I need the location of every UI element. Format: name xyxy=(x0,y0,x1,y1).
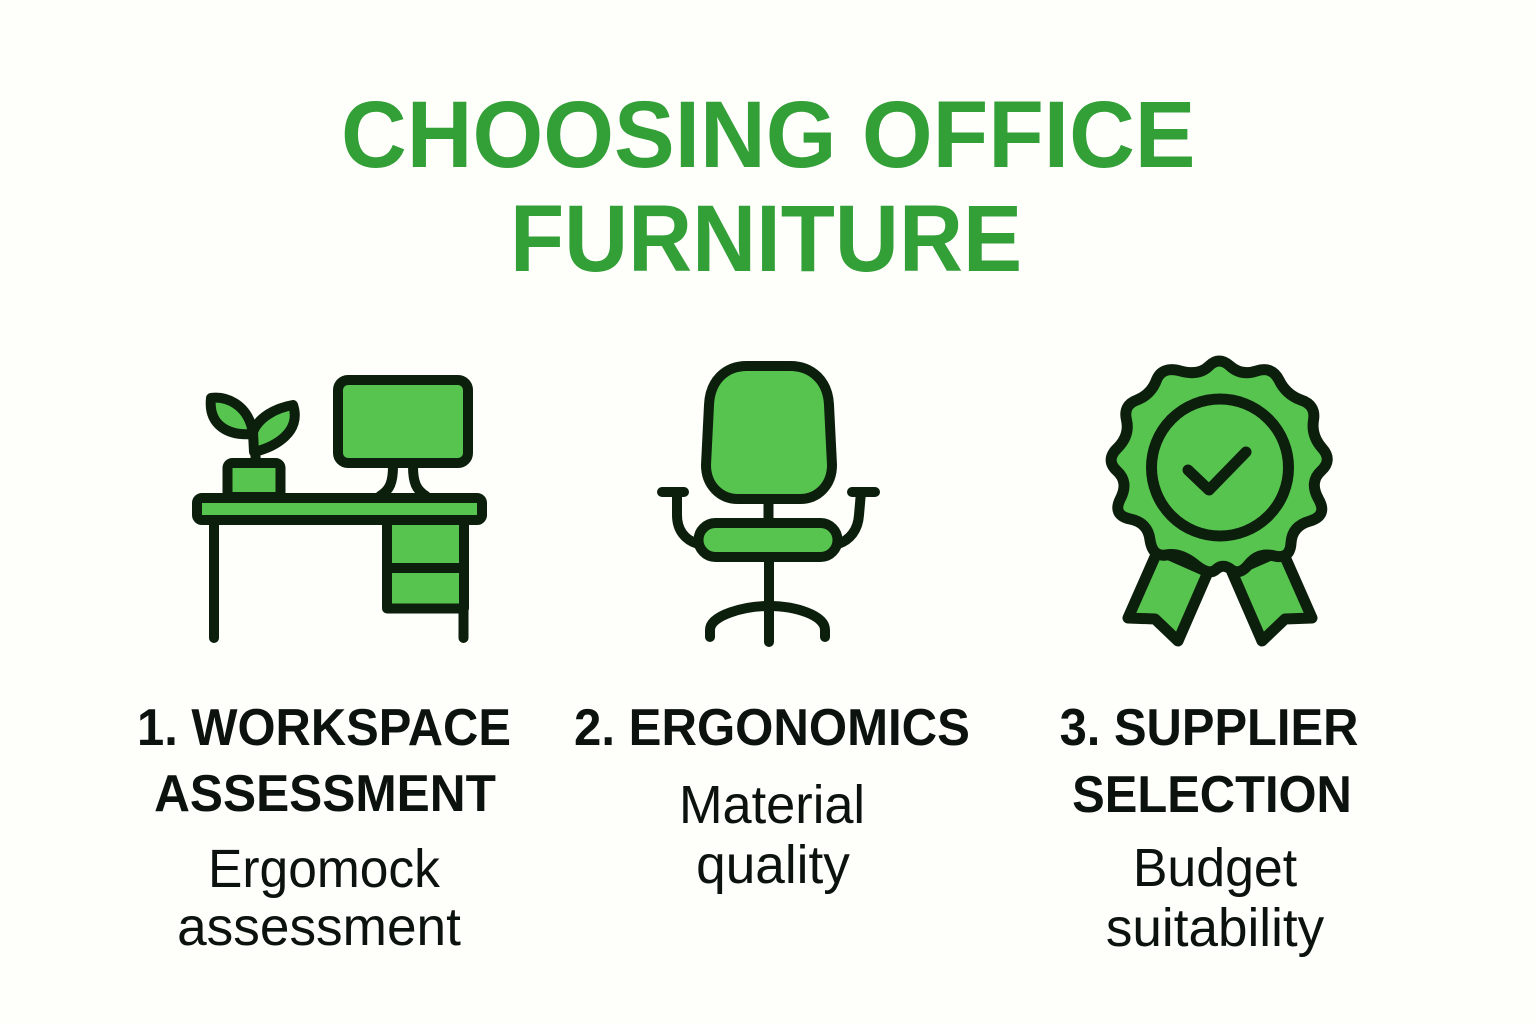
step 1 description: assessment xyxy=(177,897,461,957)
step 1 description: Ergomock xyxy=(208,839,439,899)
step 3 text block xyxy=(1060,699,1358,958)
title: CHOOSING OFFICE xyxy=(341,82,1196,188)
step 2 heading: 2. ERGONOMICS xyxy=(574,699,970,757)
title xyxy=(341,82,1196,292)
step 1 heading: ASSESSMENT xyxy=(154,765,496,823)
step 1 description xyxy=(177,839,461,957)
step 1 text block xyxy=(137,699,511,957)
step 3 heading: 3. SUPPLIER xyxy=(1060,699,1358,757)
icon: desk with monitor and plant xyxy=(192,375,487,643)
step 1 heading: 1. WORKSPACE xyxy=(137,699,511,757)
step 3 description: Budget xyxy=(1132,838,1297,898)
step 2 description xyxy=(679,775,865,895)
step 3 description: suitability xyxy=(1106,898,1324,958)
step 3 heading xyxy=(1060,699,1358,824)
step 2 description: Material xyxy=(679,775,865,835)
step 2 description: quality xyxy=(696,835,850,895)
icon: office chair xyxy=(657,361,880,647)
icon: award badge with check xyxy=(1106,356,1333,646)
step 1 heading xyxy=(137,699,511,823)
title: FURNITURE xyxy=(510,186,1022,292)
step 2 text block xyxy=(574,699,970,895)
step 3 heading: SELECTION xyxy=(1072,766,1352,824)
step 3 description xyxy=(1106,838,1324,958)
